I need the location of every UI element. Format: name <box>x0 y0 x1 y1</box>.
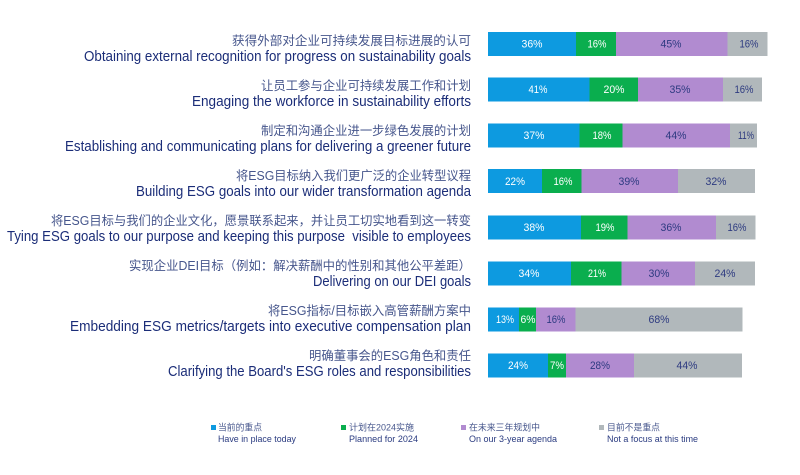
row 7: executive compensation <box>70 303 742 335</box>
legend item: planned for 2024: Planned for 2024 <box>349 434 418 445</box>
row 3 bar: 37% <box>524 130 545 142</box>
row 7 bar: 16% <box>546 314 566 326</box>
row 6: DEI goals <box>129 258 755 290</box>
row 7 label: 将ESG指标/目标嵌入高管薪酬方案中 <box>268 303 471 318</box>
row 3 label: 制定和沟通企业进一步绿色发展的计划 <box>261 123 471 138</box>
row 7 bar <box>488 308 742 332</box>
row 8 bar: 24% <box>508 360 528 372</box>
legend item: have in place today: 当前的重点 <box>218 422 262 432</box>
row 8 label <box>168 348 471 380</box>
legend item: 3-year agenda: On our 3-year agenda <box>469 434 558 445</box>
row 3 label: Establishing and communicating plans for delivering a greener future <box>65 139 471 155</box>
row 1: external recognition <box>84 32 768 65</box>
row 4 bar: 22% <box>505 176 525 188</box>
row 4 bar <box>488 169 755 193</box>
row 8 label: Clarifying the Board's ESG roles and responsibilities <box>168 364 471 380</box>
row 1 bar <box>488 32 768 56</box>
row 1 label: Obtaining external recognition for progress on sustainability goals <box>84 49 471 65</box>
row 2 label: Engaging the workforce in sustainability efforts <box>192 94 471 110</box>
legend item: have in place today <box>211 422 296 445</box>
row 6 bar: 21% <box>588 268 606 280</box>
row 8 bar: 7% <box>550 360 564 372</box>
row 6 label: Delivering on our DEI goals <box>313 274 471 290</box>
row 8 bar: 28% <box>590 360 610 372</box>
row 6 bar <box>488 262 755 286</box>
row 5 label: 将ESG目标与我们的企业文化，愿景联系起来，并让员工切实地看到这一转变 <box>51 213 471 228</box>
row 5 label: Tying ESG goals to our purpose and keeping this purpose visible to employees <box>7 229 471 245</box>
row 3: greener future plans <box>65 123 757 155</box>
legend item: planned for 2024: 计划在2024实施 <box>349 422 414 432</box>
row 7 bar: 6% <box>520 314 536 326</box>
row 5 bar: 16% <box>728 222 747 234</box>
row 2 bar: 41% <box>528 84 548 96</box>
row 6 label <box>129 258 471 290</box>
row 7 label <box>70 303 471 335</box>
row 4 label <box>136 168 472 200</box>
row 4: transformation agenda <box>136 168 755 200</box>
row 4 bar: 32% <box>706 176 727 188</box>
row 1 label: 获得外部对企业可持续发展目标进展的认可 <box>232 33 471 48</box>
row 2 label: 让员工参与企业可持续发展工作和计划 <box>261 78 471 93</box>
row 1 bar: 36% <box>522 38 543 50</box>
row 7 bar: 68% <box>648 314 670 326</box>
legend item: not a focus: Not a focus at this time <box>607 434 698 445</box>
row 4 label: Building ESG goals into our wider transformation agenda <box>136 184 472 200</box>
row 1 bar: 16% <box>588 38 607 50</box>
row 5 bar: 38% <box>524 222 545 234</box>
row 3 bar: 44% <box>666 130 687 142</box>
row 4 bar: 16% <box>554 176 573 188</box>
row 8: board roles <box>168 348 742 380</box>
legend item: planned for 2024 <box>341 422 418 445</box>
legend item: 3-year agenda: 在未来三年规划中 <box>469 422 540 432</box>
row 3 bar: 18% <box>592 130 612 142</box>
row 5 label <box>7 213 471 245</box>
row 1 bar: 45% <box>660 38 682 50</box>
row 5 bar: 36% <box>660 222 682 234</box>
row 1 label <box>84 33 471 65</box>
legend item: have in place today: Have in place today <box>218 434 296 445</box>
legend item: 3-year agenda <box>461 422 558 445</box>
row 2 bar: 16% <box>734 84 754 96</box>
legend item: not a focus <box>599 422 698 445</box>
row 2 bar: 20% <box>604 84 625 96</box>
row 2 label <box>192 78 471 110</box>
row 6 label: 实现企业DEI目标（例如：解决薪酬中的性别和其他公平差距） <box>129 258 471 273</box>
row 6 bar: 30% <box>648 268 670 280</box>
row 7 bar: 13% <box>496 314 514 326</box>
row 3 label <box>65 123 471 155</box>
row 3 bar: 11% <box>738 130 754 142</box>
row 4 label: 将ESG目标纳入我们更广泛的企业转型议程 <box>236 168 471 183</box>
row 7 label: Embedding ESG metrics/targets into executive compensation plan <box>70 319 471 335</box>
legend item: not a focus: 目前不是重点 <box>607 422 660 432</box>
row 4 bar: 39% <box>618 176 640 188</box>
row 6 bar: 34% <box>518 268 540 280</box>
row 3 bar <box>488 124 757 148</box>
row 5 bar: 19% <box>596 222 615 234</box>
row 5 bar <box>488 216 756 240</box>
row 8 bar: 44% <box>676 360 698 372</box>
row 8 label: 明确董事会的ESG角色和责任 <box>309 348 471 363</box>
row 2 bar <box>488 78 762 102</box>
legend <box>211 422 698 445</box>
row 6 bar: 24% <box>714 268 736 280</box>
row 1 bar: 16% <box>740 38 759 50</box>
row 8 bar <box>488 354 742 378</box>
row 2 bar: 35% <box>670 84 691 96</box>
row 5: purpose visible to employees <box>7 213 756 245</box>
row 2: workforce engagement <box>192 78 762 110</box>
